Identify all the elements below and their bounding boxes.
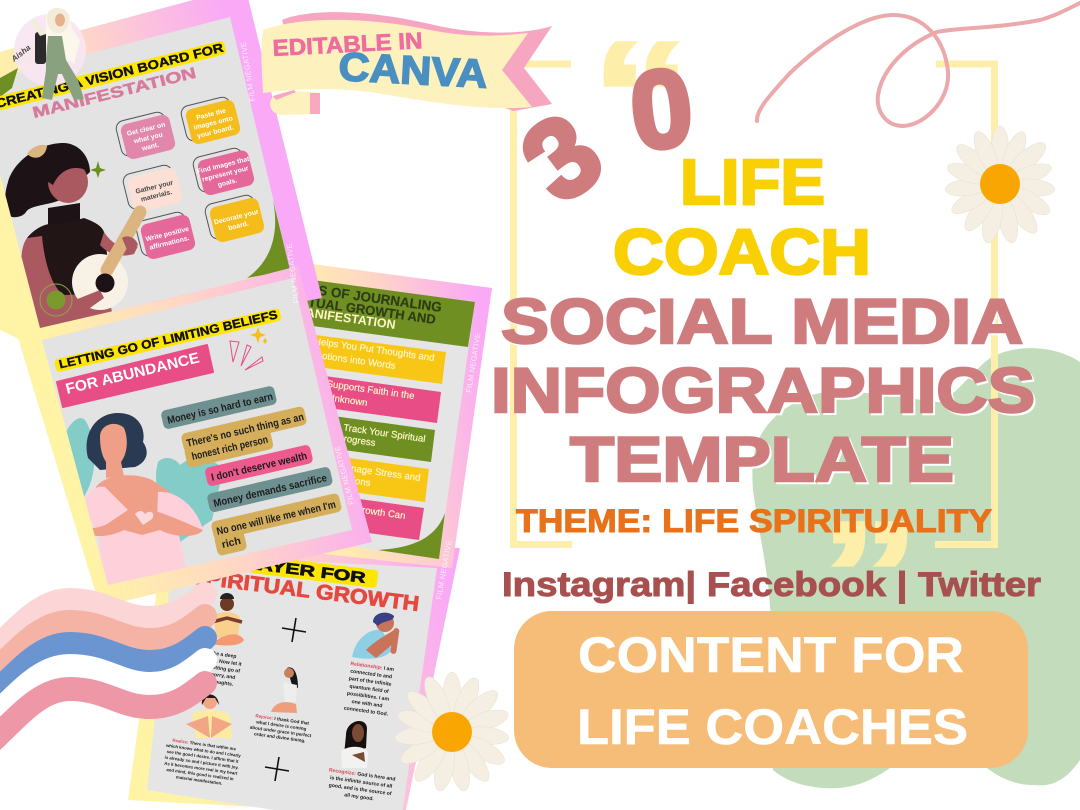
tag: no one will like me: No one will like me when I'm: [215, 499, 337, 538]
tag: no one will like me: rich: [221, 535, 242, 551]
text: take a deep breath: [198, 649, 243, 689]
opening quote mark: “: [591, 10, 691, 178]
text: recognize: [325, 767, 396, 805]
heading strip: letting go: LETTING GO OF LIMITING BELIEFS: [57, 307, 279, 371]
figure: person praying with blue shirt: [352, 613, 400, 659]
banner heading: editable in: EDITABLE IN: [272, 27, 423, 61]
title: social media infographics template: TEMPLATE: [570, 425, 954, 495]
heading strip: prayer for: PRAYER FOR: [228, 553, 367, 587]
text: relationship: [343, 661, 395, 718]
banner: for abundance: FOR ABUNDANCE: [64, 349, 201, 398]
tile: write affirmations: affirmations.: [149, 235, 190, 252]
list bar 3: [286, 410, 435, 462]
text: take a deep breath: go. Letting go of: [200, 663, 241, 675]
curly pink line: [757, 2, 1080, 126]
text: recognize: all my good.: [344, 792, 375, 802]
text: rejoice: about under grace in perfect: [249, 725, 312, 738]
tag: no such thing as honest rich person: [180, 406, 311, 468]
side label lower: FILM NEGATIVE: [434, 539, 453, 600]
text: realize: Realize: There is that within me: [172, 738, 237, 752]
text: take a deep breath: breath. Now let it: [200, 656, 242, 668]
heading: spiritual growth: SPIRITUAL GROWTH: [189, 565, 420, 616]
tile: get clear: Get clear on: [126, 122, 166, 138]
tile: get clear: [115, 110, 177, 161]
tag: no such thing as honest rich person: There's no such thing as an: [185, 411, 305, 450]
card: benefits of journaling: [260, 263, 492, 600]
title: social media infographics template: SOCIAL MEDIA: [501, 287, 1023, 357]
banner curl: [270, 91, 320, 115]
side label: FILM NEGATIVE: [464, 332, 482, 393]
tile: decorate board: Decorate your: [213, 209, 260, 227]
theme line: THEME: LIFE SPIRITUALITY: [516, 503, 992, 539]
tile: write affirmations: Write positive: [145, 226, 190, 243]
tile: paste images: your board.: [197, 124, 235, 140]
panel: content for life coaches: CONTENT FOR: [578, 627, 964, 683]
text: take a deep breath: all worry, and: [203, 671, 236, 681]
header: benefits of journaling: MANIFESTATION: [295, 304, 397, 332]
side label: FILM NEGATIVE: [239, 41, 257, 102]
title: life coach: [613, 146, 871, 288]
list bar 4: Emotions: [330, 473, 371, 489]
text: realize: As it becomes more real in my heart: [164, 761, 238, 776]
text: relationship: Relationship: I am: [350, 661, 395, 673]
header: benefits of journaling: BENEFITS OF JOURNALING: [260, 275, 443, 315]
figure: woman with long dark hair: [341, 721, 368, 768]
list bar 5: [275, 488, 424, 540]
text: relationship: one with and: [351, 699, 383, 709]
tile: get clear: want.: [140, 142, 160, 153]
banner: editable in canva: [261, 12, 552, 115]
tile: get clear: what you: [132, 131, 164, 146]
card: create a vision board: [0, 0, 322, 352]
text: realize: material manifestation.: [176, 774, 223, 786]
side label: FILM NEGATIVE: [333, 445, 356, 506]
tile: write affirmations: [135, 210, 197, 261]
title: social media infographics template: INFOGRAPHICS: [491, 356, 1035, 426]
closing quote mark: ”: [820, 490, 920, 658]
tag: money demands sacrifice: Money demands sacrifice: [212, 472, 328, 510]
list bar 1: [296, 333, 446, 384]
text: recognize: Recognize: God is here and: [329, 767, 396, 783]
tile: find images: goals.: [217, 177, 238, 189]
number: 0: 0: [625, 45, 698, 174]
list bar 1: Emotions into Words: [307, 349, 396, 372]
icon: daisy top right: [944, 126, 1056, 245]
heading: manifestation: MANIFESTATION: [31, 65, 198, 122]
text: take a deep breath: Take a deep: [207, 650, 237, 660]
tile: paste images: images onto: [193, 115, 234, 132]
text: recognize: is the infinite source of all: [330, 775, 393, 790]
list bar 3: Progress: [337, 433, 376, 449]
icon: sparkles: [250, 327, 267, 344]
icon: plus sign top: [282, 618, 306, 642]
tag: money is so hard to earn: Money is so hard to earn: [166, 391, 274, 427]
tile: gather materials: materials.: [140, 189, 173, 204]
panel: content for life coaches: [514, 611, 1028, 768]
side label: FILM NEGATIVE: [406, 745, 426, 806]
logo: fashion figure badge: [9, 8, 86, 100]
list bar 5: Growth Can: [354, 504, 406, 522]
text: relationship: connected to God.: [343, 705, 389, 718]
tile: gather materials: Gather your: [135, 179, 174, 196]
illustration: woman with guitar: [5, 143, 140, 330]
tile: gather materials: [122, 163, 184, 214]
header: benefits of journaling: [260, 275, 475, 347]
text: rejoice: [249, 713, 314, 744]
tag: no such thing as honest rich person: honest rich person: [191, 434, 269, 463]
text: realize: is already so and I picture it with joy.: [164, 755, 239, 770]
banner: for abundance: [57, 345, 213, 407]
header: benefits of journaling: SPIRITUAL GROWTH AND: [274, 290, 437, 327]
logo: fashion figure badge: Aisha: [9, 43, 33, 64]
text: realize: which knows what to do and I clearly: [165, 743, 242, 758]
icon: spikes: [230, 341, 263, 370]
yellow frame: [514, 64, 994, 544]
list bar 4: [280, 449, 429, 502]
text: relationship: quantum field of: [349, 684, 389, 695]
text: realize: and mind, this good is realized in: [166, 767, 234, 781]
heading strip: prayer for: [228, 552, 379, 588]
green corner: [247, 200, 290, 278]
tag: i don't deserve wealth: I don't deserve wealth: [210, 450, 308, 484]
text: realize: [161, 737, 243, 788]
tile: find images: [192, 145, 256, 197]
title: social media infographics template: [491, 287, 1035, 495]
list bar 3: Track Your Spiritual: [343, 423, 426, 445]
figure: kneeling woman: [271, 667, 298, 713]
banner heading: canva: CANVA: [338, 45, 489, 97]
green corner: [378, 513, 445, 559]
heading strip: create a vision board for: CREATING A VISION BOARD FOR: [0, 41, 225, 111]
ribbon waves: [0, 594, 205, 745]
tile: paste images: Paste the: [196, 108, 227, 122]
card: prayer for spiritual growth: [128, 530, 460, 810]
panel: content for life coaches: LIFE COACHES: [577, 699, 968, 755]
tile: find images: represent your: [201, 165, 250, 184]
text: relationship: possibilities. I am: [347, 691, 390, 703]
icon: sparkle: [90, 161, 106, 178]
figure: woman in yellow jacket: [186, 694, 232, 738]
tile: decorate board: [204, 193, 266, 244]
number: 3: 3: [499, 89, 624, 226]
list bar 2: [292, 372, 441, 423]
icon: plus sign bottom: [265, 757, 289, 781]
platform line: Instagram| Facebook | Twitter: [502, 566, 1041, 604]
side label upper: FILM NEGATIVE: [285, 243, 301, 304]
tag: no one will like me: [210, 493, 346, 556]
icon: daisy bottom: [394, 672, 511, 793]
list bar 2: Unknown: [327, 393, 368, 409]
title: life coach: COACH: [613, 216, 871, 288]
green background blob: [752, 348, 1080, 788]
text: take a deep breath: all thoughts.: [203, 678, 234, 688]
title: life coach: LIFE: [680, 146, 825, 218]
tile: find images: Find images that: [196, 156, 251, 176]
tile: paste images: [180, 95, 242, 146]
list bar 1: Helps You Put Thoughts and: [313, 336, 435, 364]
text: rejoice: what I desire is coming: [255, 719, 307, 731]
text: relationship: connected to and: [350, 669, 392, 680]
text: rejoice: order and divine timing.: [254, 731, 306, 743]
icon: green corner tab: [0, 68, 18, 97]
tile: decorate board: board.: [228, 220, 250, 232]
text: recognize: good, and is the source of: [328, 782, 392, 797]
text: relationship: part of the infinite: [348, 676, 392, 688]
text: rejoice: Rejoice: I thank God that: [255, 713, 310, 726]
list bar 4: Manage Stress and: [337, 461, 421, 484]
list bar 2: Supports Faith in the: [326, 379, 415, 402]
illustration: woman with heart hands: [64, 413, 223, 590]
card: letting go of limiting beliefs: [18, 243, 372, 607]
figure: meditating person: [212, 593, 244, 645]
text: realize: see the good I desire. I affirm that it: [166, 749, 239, 764]
